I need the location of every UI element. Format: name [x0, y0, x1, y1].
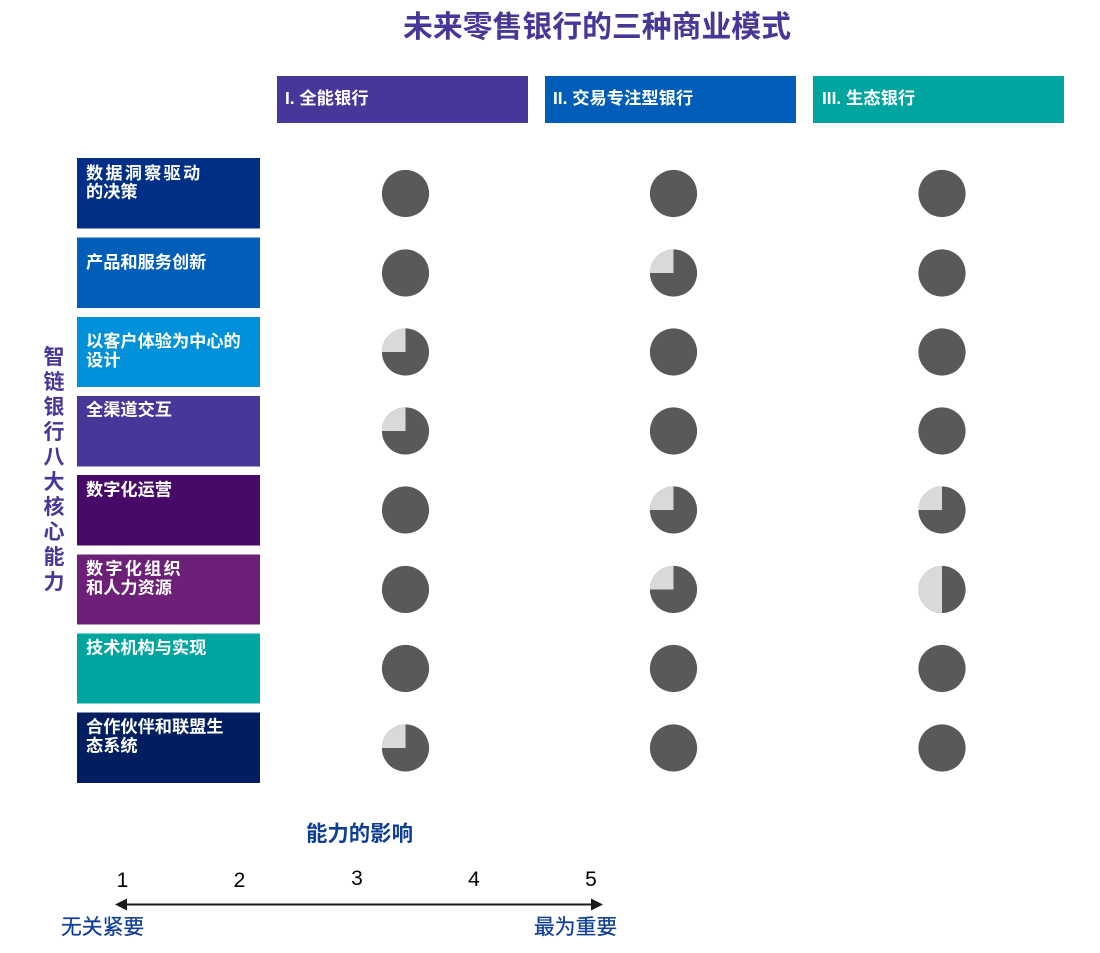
pie row 3	[382, 328, 966, 376]
capability: 数据洞察驱动的决策: 数据洞察驱动	[86, 163, 202, 183]
vertical side label: 链	[44, 371, 64, 394]
capability: 合作伙伴和联盟生态系统	[77, 712, 260, 783]
legend low label: 无关紧要	[61, 916, 144, 939]
pie row 4	[382, 407, 966, 455]
capability: 全渠道交互	[77, 396, 260, 466]
legend scale numbers: 4	[468, 868, 480, 891]
legend scale numbers: 2	[234, 869, 245, 892]
pie row 2	[382, 249, 966, 297]
pie row 8	[382, 724, 966, 772]
capability: 技术机构与实现: 技术机构与实现	[86, 638, 206, 658]
capability: 技术机构与实现	[77, 634, 260, 704]
legend high label: 最为重要	[534, 916, 617, 939]
vertical side label: 八	[44, 446, 64, 469]
legend scale numbers	[117, 867, 597, 892]
legend double-headed arrow	[115, 898, 603, 910]
vertical side label: 力	[44, 571, 64, 594]
capability: 全渠道交互: 全渠道交互	[86, 400, 172, 420]
title: 未来零售银行的三种商业模式	[403, 11, 791, 44]
pie row 1	[382, 170, 966, 217]
capability: 产品和服务创新	[77, 238, 260, 308]
capability: 以客户体验为中心的设计: 以客户体验为中心的	[86, 331, 241, 351]
capability: 合作伙伴和联盟生态系统: 态系统	[86, 736, 138, 756]
vertical side label: 心	[44, 521, 64, 544]
vertical side label	[44, 346, 64, 594]
capability: 合作伙伴和联盟生态系统: 合作伙伴和联盟生	[86, 716, 224, 736]
column header: III. 生态银行	[813, 76, 1064, 123]
vertical side label: 银	[44, 396, 64, 419]
column header: I. 全能银行: I. 全能银行	[285, 88, 369, 108]
capability: 数字化组织和人力资源: 和人力资源	[86, 578, 172, 598]
pie row 7	[382, 645, 966, 692]
pie row 6	[382, 566, 966, 613]
vertical side label: 行	[44, 421, 64, 444]
capability: 数字化运营	[77, 475, 260, 546]
vertical side label: 核	[44, 495, 64, 519]
capability: 产品和服务创新: 产品和服务创新	[86, 252, 206, 272]
capability: 数字化运营: 数字化运营	[86, 480, 172, 500]
column header: III. 生态银行: III. 生态银行	[822, 88, 915, 108]
column header: I. 全能银行	[277, 76, 528, 123]
legend scale numbers: 5	[585, 868, 597, 891]
vertical side label: 能	[44, 546, 64, 569]
capability: 数字化组织和人力资源	[77, 554, 260, 624]
vertical side label: 大	[44, 471, 64, 494]
legend heading: 能力的影响	[306, 822, 413, 846]
capability: 数据洞察驱动的决策	[77, 158, 260, 228]
column header: II. 交易专注型银行: II. 交易专注型银行	[553, 88, 693, 108]
legend scale numbers: 3	[351, 867, 363, 890]
column header: II. 交易专注型银行	[545, 76, 796, 123]
capability: 数字化组织和人力资源: 数字化组织	[86, 558, 183, 578]
vertical side label: 智	[44, 346, 64, 369]
pie row 5	[382, 486, 966, 534]
legend scale numbers: 1	[117, 869, 128, 892]
capability: 数据洞察驱动的决策: 的决策	[86, 182, 138, 202]
capability: 以客户体验为中心的设计	[77, 317, 260, 387]
capability: 以客户体验为中心的设计: 设计	[86, 350, 120, 370]
